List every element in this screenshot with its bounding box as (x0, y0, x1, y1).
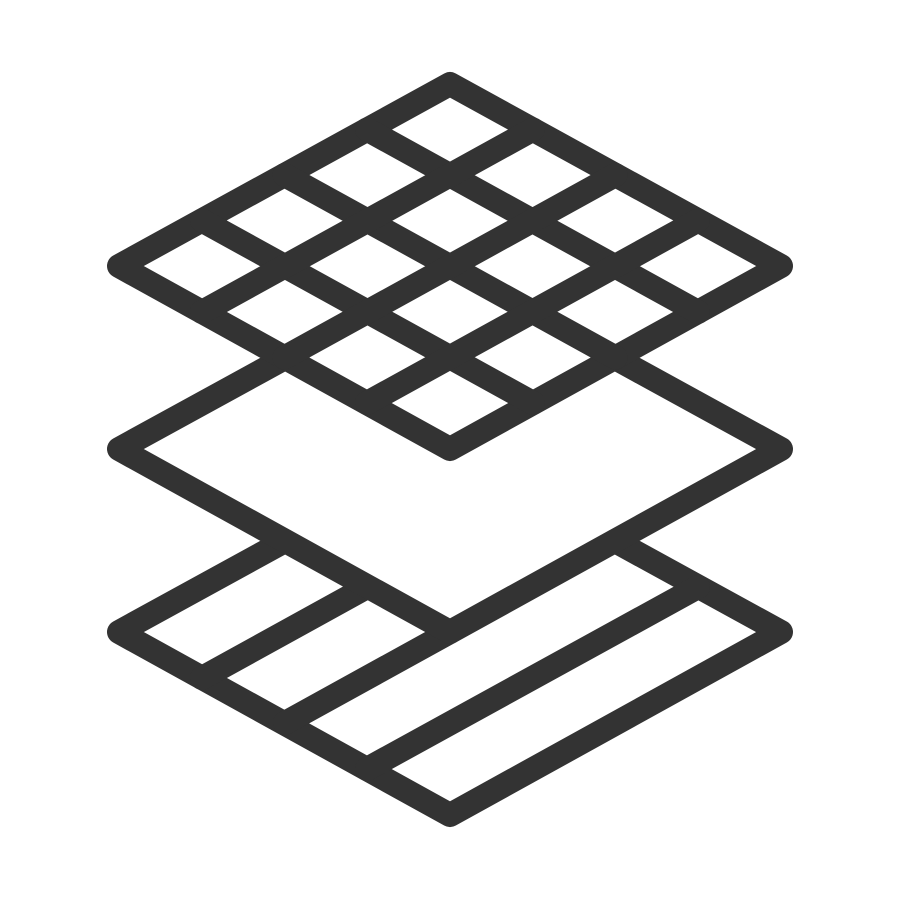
middle layer: plain plane (119, 358, 781, 632)
top layer: grid plane (119, 84, 781, 449)
bottom layer: striped plane (119, 541, 781, 815)
